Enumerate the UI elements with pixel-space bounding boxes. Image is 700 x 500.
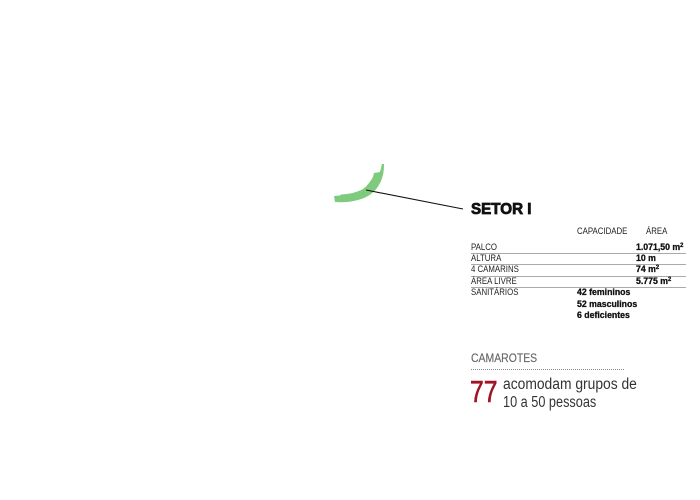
row: altura: ALTURA <box>471 253 501 263</box>
value: altura: 10 m <box>636 253 656 263</box>
value: sanitarios masculinos: 52 masculinos <box>577 299 637 309</box>
text: camarotes description <box>503 376 637 411</box>
text: description line 2: 10 a 50 pessoas <box>503 394 596 411</box>
column header: area: ÁREA <box>646 226 667 236</box>
value: palco area: 1.071,50 m2 <box>636 242 683 252</box>
row: camarins: 4 CAMARINS <box>471 264 519 274</box>
panel: setor I details <box>471 200 687 322</box>
number: 77: 77 <box>470 374 498 409</box>
row: area livre: ÁREA LIVRE <box>471 276 517 286</box>
value: area livre: 5.775 m2 <box>636 276 671 286</box>
text: description line 1: acomodam grupos de <box>503 376 637 393</box>
column header: capacidade: CAPACIDADE <box>577 226 627 236</box>
heading: setor I: SETOR I <box>471 201 532 218</box>
row: palco: PALCO <box>471 242 497 252</box>
value: sanitarios femininos: 42 femininos <box>577 287 630 297</box>
heading: camarotes: CAMAROTES <box>471 351 537 365</box>
dotted divider <box>471 369 624 370</box>
value: sanitarios deficientes: 6 deficientes <box>577 310 630 320</box>
value: camarins area: 74 m2 <box>636 264 659 274</box>
row: sanitarios: SANITÁRIOS <box>471 287 518 297</box>
